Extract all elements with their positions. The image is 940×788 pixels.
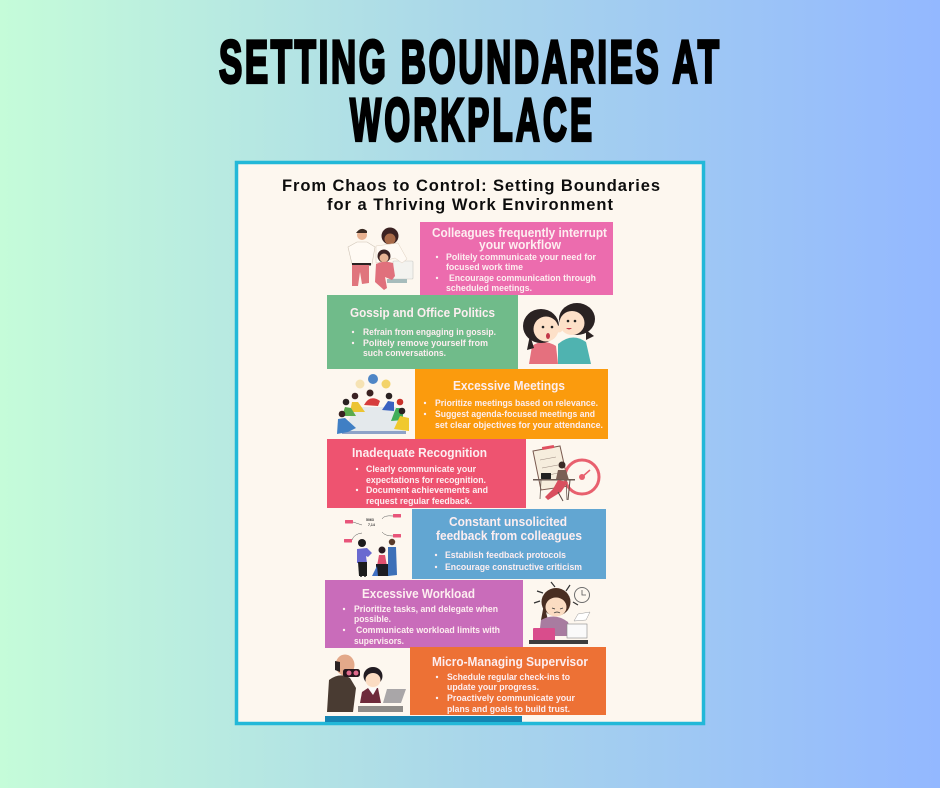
icon: team around a meeting table xyxy=(337,374,409,434)
heading: feedback from colleagues xyxy=(436,528,582,543)
poster subtitle xyxy=(282,177,660,214)
bullet list xyxy=(435,550,582,572)
poster subtitle: From Chaos to Control: Setting Boundaries xyxy=(282,177,660,195)
bullet list: Document achievements and xyxy=(366,485,488,495)
panel: micro-managing supervisor xyxy=(410,647,606,715)
bullet list: request regular feedback. xyxy=(366,496,472,506)
panel: excessive meetings xyxy=(415,369,608,439)
bullet list: Refrain from engaging in gossip. xyxy=(363,327,496,337)
bullet list: Schedule regular check-ins to xyxy=(447,672,570,682)
heading: Micro-Managing Supervisor xyxy=(432,654,588,669)
heading xyxy=(432,225,608,252)
bullet list: scheduled meetings. xyxy=(446,283,532,293)
bullet list: such conversations. xyxy=(363,348,446,358)
bullet list: possible. xyxy=(354,614,391,624)
heading: Gossip and Office Politics xyxy=(350,305,495,320)
bullet list: Encourage constructive criticism xyxy=(445,562,582,572)
icon: team discussing feedback xyxy=(344,514,401,577)
heading: Constant unsolicited xyxy=(449,514,567,529)
poster frame xyxy=(236,162,704,724)
bullet list: Proactively communicate your xyxy=(447,693,575,703)
bullet list: Clearly communicate your xyxy=(366,464,476,474)
bullet list: Communicate workload limits with xyxy=(356,625,500,635)
bullet list: Politely remove yourself from xyxy=(363,338,488,348)
icon: team discussing feedback: 5063 xyxy=(366,518,374,522)
icon: stressed woman at laptop xyxy=(529,582,590,644)
title: WORKPLACE xyxy=(350,87,592,154)
title xyxy=(219,30,719,154)
title: SETTING BOUNDARIES AT xyxy=(219,30,719,96)
bullet list xyxy=(436,672,575,714)
poster subtitle: for a Thriving Work Environment xyxy=(327,196,614,214)
icon: supervisor with binoculars watching worker xyxy=(327,654,406,712)
panel: cropped teal strip xyxy=(325,716,522,722)
bullet list: expectations for recognition. xyxy=(366,475,486,485)
bullet list xyxy=(424,398,603,430)
bullet list: Suggest agenda-focused meetings and xyxy=(435,409,595,419)
bullet list: update your progress. xyxy=(447,682,539,692)
bullet list: Prioritize tasks, and delegate when xyxy=(354,604,498,614)
heading: Colleagues frequently interrupt xyxy=(432,225,608,240)
bullet list: Politely communicate your need for xyxy=(446,252,596,262)
panel: colleagues interrupt xyxy=(420,222,613,295)
panel: inadequate recognition xyxy=(327,439,526,508)
bullet list: supervisors. xyxy=(354,636,404,646)
icon: team discussing feedback: 7,14 xyxy=(368,523,375,527)
bullet list xyxy=(343,604,500,646)
bullet list: set clear objectives for your attendance. xyxy=(435,420,603,430)
bullet list xyxy=(356,464,488,506)
icon: clipboard, clock and person at desk xyxy=(533,445,599,501)
bullet list: Prioritize meetings based on relevance. xyxy=(435,398,598,408)
bullet list: plans and goals to build trust. xyxy=(447,704,570,714)
bullet list xyxy=(436,252,596,293)
bullet list: focused work time xyxy=(446,262,523,272)
bullet list: Establish feedback protocols xyxy=(445,550,566,560)
bullet list xyxy=(352,327,496,358)
icon: two girls whispering xyxy=(523,303,595,364)
icon: three colleagues at a computer xyxy=(348,228,413,290)
heading: Excessive Workload xyxy=(362,586,475,601)
heading xyxy=(436,514,582,543)
heading: your workflow xyxy=(479,237,562,252)
heading: Excessive Meetings xyxy=(453,378,565,393)
panel: excessive workload xyxy=(325,580,523,648)
panel: constant unsolicited feedback xyxy=(412,509,606,579)
bullet list: Encourage communication through xyxy=(449,273,596,283)
heading: Inadequate Recognition xyxy=(352,445,487,460)
panel: gossip and office politics xyxy=(327,295,518,369)
